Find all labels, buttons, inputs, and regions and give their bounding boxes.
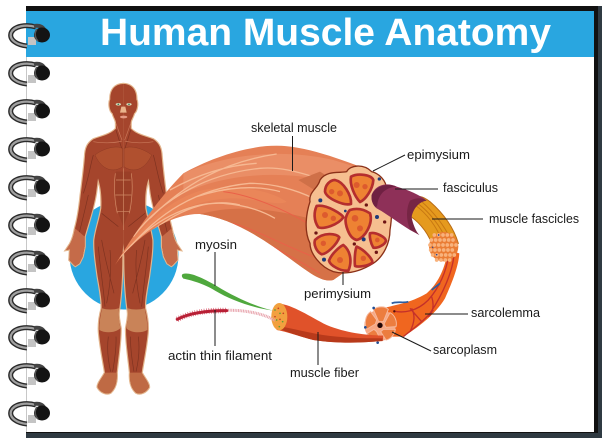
human body muscle figure xyxy=(66,84,181,394)
face xyxy=(120,107,127,113)
feet xyxy=(98,373,117,394)
label: muscle fascicles: muscle fascicles xyxy=(489,212,579,226)
labels xyxy=(168,121,579,380)
spiral binding xyxy=(11,26,50,424)
leader lines xyxy=(215,136,483,365)
muscle fiber xyxy=(271,303,383,343)
pectorals xyxy=(95,147,152,170)
label: skeletal muscle: skeletal muscle xyxy=(251,121,337,135)
abdominals xyxy=(115,172,132,227)
fasciculus and muscle fascicles xyxy=(372,184,458,261)
actin filament xyxy=(176,310,275,321)
label: perimysium: perimysium xyxy=(304,287,371,301)
muscle cross section xyxy=(306,166,391,273)
sarcolemma cross section xyxy=(364,310,396,341)
label: sarcoplasm: sarcoplasm xyxy=(433,343,497,357)
blue circle xyxy=(70,200,178,310)
label: actin thin filament: actin thin filament xyxy=(168,349,273,363)
hands xyxy=(66,228,85,266)
skeletal muscle bundle xyxy=(116,146,357,280)
muscle detail lines xyxy=(78,130,168,372)
fascicle bundles xyxy=(315,175,386,271)
myosin filament xyxy=(182,274,273,311)
label: sarcolemma: sarcolemma xyxy=(471,306,540,320)
label: myosin: myosin xyxy=(195,238,237,252)
label: epimysium: epimysium xyxy=(407,148,470,162)
label: muscle fiber: muscle fiber xyxy=(290,366,359,380)
title banner xyxy=(26,11,594,57)
knees xyxy=(99,308,120,332)
title: Human Muscle Anatomy xyxy=(100,12,551,54)
sarcolemma muscle segment xyxy=(364,250,459,344)
label: fasciculus: fasciculus xyxy=(443,181,498,195)
